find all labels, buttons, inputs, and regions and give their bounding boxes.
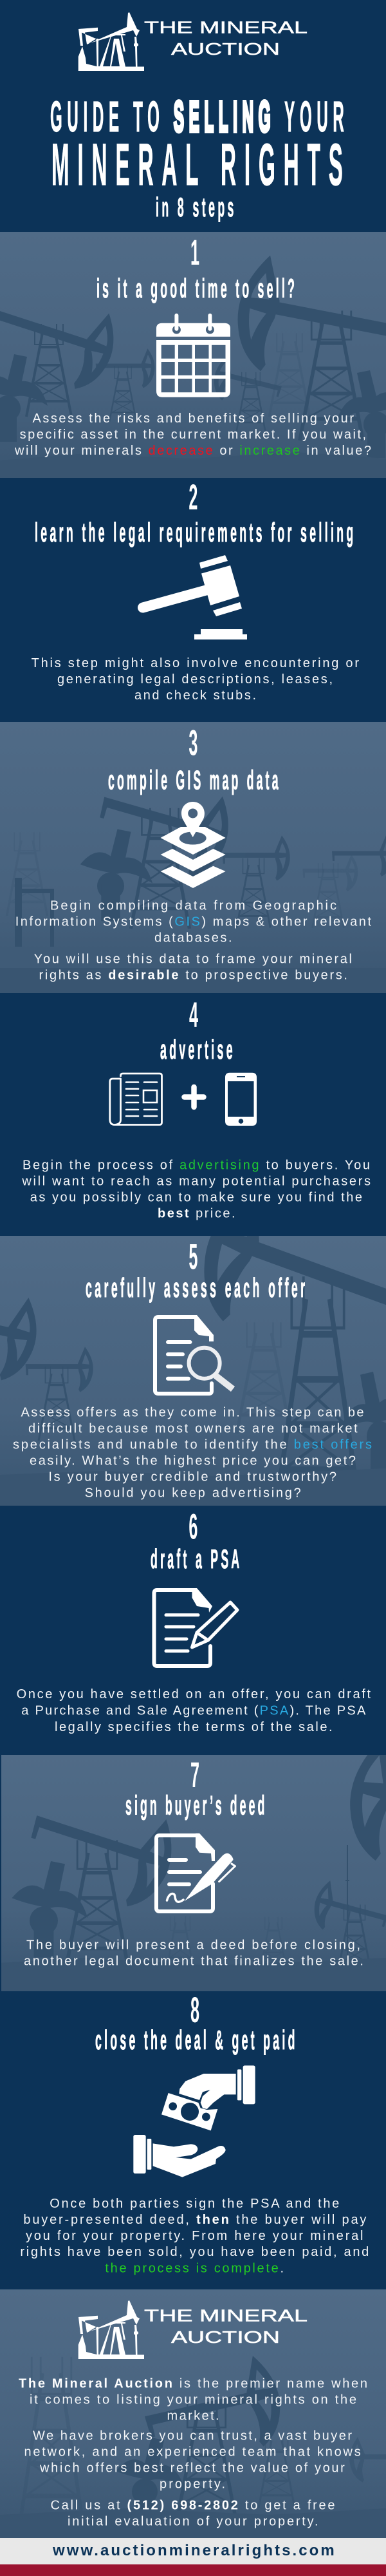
website bar: www.auctionmineralrights.com: [52, 2542, 335, 2559]
heading: step 1: is it a good time to sell?: [96, 273, 295, 303]
text: step 4: as you possibly can to make sure you find the: [30, 1191, 362, 1205]
text: step 3: [15, 898, 371, 983]
text: step 3: rights as desirable to prospective buyers.: [39, 969, 347, 983]
icon: calendar: [156, 314, 230, 397]
text: step 6: legally specifies the terms of the sale.: [55, 1720, 333, 1734]
text: step 1: specific asset in the current market. If you wait,: [20, 428, 366, 442]
text: step 6: [17, 1687, 371, 1734]
text: step 4: best price.: [158, 1207, 235, 1221]
panel: step 3: [0, 722, 386, 993]
text: step 2: and check stubs.: [134, 688, 256, 703]
background: pump jacks step 1: [0, 256, 386, 457]
step number 4: 4: [189, 996, 198, 1036]
step number 3: 3: [188, 724, 198, 763]
icon: document with pen: [156, 1833, 235, 1911]
text: step 8: rights have been sold, you have been paid, and: [20, 2245, 369, 2259]
text: step 8: buyer-presented deed, then the buyer will pay: [23, 2213, 366, 2227]
panel: step 1: [0, 232, 386, 478]
logo: footer: [78, 2300, 308, 2359]
panel: step 6: [0, 1506, 386, 1755]
website bar: [0, 2538, 386, 2564]
panel: header: [0, 0, 386, 232]
text: about: market.: [167, 2409, 219, 2423]
text: step 6: Once you have settled on an offer, you can draft: [17, 1687, 371, 1701]
text: step 3: databases.: [154, 931, 232, 945]
heading: step 3: compile GIS map data: [108, 765, 279, 795]
text: step 3: Begin compiling data from Geographic: [50, 898, 336, 913]
text: step 5: [13, 1405, 372, 1500]
step number 8: 8: [190, 1991, 199, 2031]
logo: The Mineral Auction: THE MINERAL: [144, 18, 308, 37]
panel: step 8: [0, 1991, 386, 2289]
text: step 8: [20, 2197, 369, 2275]
text: step 8: you for your property. From here your mineral: [26, 2229, 363, 2243]
icon: plus sign: [184, 1087, 203, 1107]
icon: document with magnifier: [155, 1315, 233, 1394]
heading: step 4: advertise: [160, 1034, 233, 1065]
heading: step 6: draft a PSA: [151, 1544, 239, 1574]
text: about: initial evaluation of your property.: [68, 2515, 318, 2529]
step number 6: 6: [188, 1508, 198, 1548]
title: in 8 steps: [156, 192, 234, 222]
heading: step 8: close the deal & get paid: [95, 2025, 295, 2055]
text: step 3: You will use this data to frame your mineral: [34, 952, 352, 967]
text: step 2: This step might also involve encountering or: [32, 656, 359, 670]
panel: about The Mineral Auction: [0, 2289, 386, 2538]
background: pump jacks step 7: [12, 1755, 386, 1960]
panel: step 2: [0, 478, 386, 722]
text: about: property.: [160, 2477, 225, 2491]
icon: document with pencil: [154, 1588, 237, 1666]
text: about: Call us at (512) 698-2802 to get a free: [50, 2499, 335, 2513]
title: GUIDE TO SELLING YOUR: [50, 92, 344, 141]
heading: step 7: sign buyer’s deed: [125, 1790, 264, 1821]
text: about: [19, 2376, 367, 2529]
step number 5: 5: [188, 1238, 198, 1278]
text: step 5: Is your buyer credible and trustworthy?: [48, 1470, 336, 1484]
text: about: network, and an experienced team that knows: [24, 2445, 361, 2459]
text: step 7: [24, 1938, 363, 1969]
icon: smartphone: [225, 1073, 257, 1126]
text: step 4: will want to reach as many potential purchasers: [21, 1175, 371, 1189]
text: step 5: difficult because most owners are not market: [28, 1421, 358, 1435]
text: step 4: [21, 1159, 371, 1221]
panel: step 7: [0, 1732, 386, 1991]
logo: The Mineral Auction: AUCTION: [171, 39, 280, 59]
icon: map layers with location pin: [161, 802, 226, 888]
text: step 5: specialists and unable to identify the best offers: [13, 1437, 372, 1452]
background: pump jacks footer: [116, 2356, 386, 2513]
text: about: it comes to listing your mineral rights on the: [30, 2392, 356, 2407]
text: step 1: Assess the risks and benefits of selling your: [32, 412, 354, 426]
heading: step 2: learn the legal requirements for selling: [35, 517, 353, 547]
text: about: The Mineral Auction is the premier name when: [19, 2376, 367, 2391]
text: step 5: Should you keep advertising?: [85, 1486, 301, 1500]
text: step 5: Assess offers as they come in. This step can be: [21, 1405, 364, 1419]
text: step 5: easily. What’s the highest price you can get?: [30, 1454, 356, 1468]
icon: gavel: [143, 555, 247, 639]
text: step 6: a Purchase and Sale Agreement (PSA). The PSA: [21, 1703, 366, 1718]
text: step 2: [32, 656, 359, 703]
heading: step 5: carefully assess each offer: [86, 1273, 305, 1303]
text: step 1: [14, 412, 371, 458]
text: step 7: another legal document that finalizes the sale.: [24, 1955, 363, 1969]
background: pump jacks step 3: [0, 765, 386, 993]
title: [50, 92, 344, 222]
text: step 4: Begin the process of advertising to buyers. You: [23, 1159, 370, 1173]
step number 7: 7: [190, 1756, 199, 1795]
text: step 8: Once both parties sign the PSA and the: [50, 2197, 339, 2211]
panel: step 4: [0, 993, 386, 1236]
text: about: We have brokers you can trust, a vast buyer: [33, 2429, 352, 2443]
icon: hands exchanging money: [133, 2065, 255, 2177]
logo: footer: AUCTION: [171, 2327, 280, 2347]
step number 1: 1: [190, 233, 199, 273]
logo: The Mineral Auction: [78, 12, 308, 71]
title: MINERAL RIGHTS: [51, 131, 343, 198]
text: step 8: the process is complete.: [105, 2261, 284, 2275]
text: step 3: Information Systems (GIS) maps & other relevant: [15, 914, 371, 929]
step number 2: 2: [188, 478, 198, 518]
text: step 2: generating legal descriptions, leases,: [57, 672, 333, 687]
text: about: which offers best reflect the value of your: [39, 2461, 345, 2475]
bottom red bar: [0, 2564, 386, 2576]
logo: footer: THE MINERAL: [144, 2306, 308, 2325]
background: pump jacks step 5: [0, 1175, 386, 1508]
panel: step 5: [0, 1236, 386, 1506]
text: step 7: The buyer will present a deed before closing,: [26, 1938, 360, 1953]
text: step 1: will your minerals decrease or increase in value?: [14, 444, 371, 458]
icon: newspaper: [110, 1074, 162, 1124]
